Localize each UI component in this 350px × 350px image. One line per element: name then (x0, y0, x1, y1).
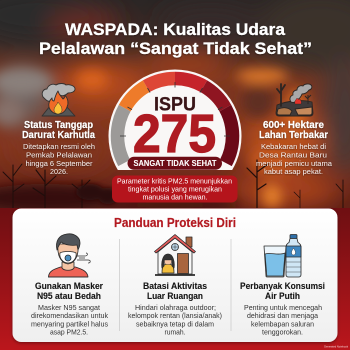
title: WASPADA: Kualitas Udara (65, 20, 286, 39)
panel: panduan proteksi diri (12, 208, 338, 342)
icon: glass and water bottle (264, 234, 301, 277)
gauge backing disc (108, 70, 242, 170)
text block: air putih description: dehidrasi dan menjaga (247, 312, 318, 320)
icon: person with N95 mask (48, 234, 90, 277)
bottom red band (0, 208, 350, 350)
callout: PM2.5 parameter: manusia dan hewan. (142, 194, 208, 202)
text block: 600+ hektare: kabut asap pekat. (264, 168, 323, 176)
text block: aktivitas description (128, 304, 222, 336)
text block: aktivitas heading (143, 281, 207, 301)
text block: masker heading: Gunakan Masker (35, 281, 103, 291)
text block: status tanggap darurat: hingga 6 September (26, 160, 93, 168)
text block: air putih heading: Perbanyak Konsumsi (240, 281, 325, 291)
text block: aktivitas heading: Batasi Aktivitas (143, 281, 207, 291)
value 275: 275 (133, 104, 216, 164)
text block: masker description (31, 304, 108, 336)
callout: PM2.5 parameter: Parameter kritis PM2.5 menunjukkan (117, 178, 232, 185)
ISPU label: ISPU (154, 94, 196, 116)
text block: status tanggap darurat: Ditetapkan resmi oleh (23, 143, 95, 151)
text block: air putih heading (240, 281, 325, 301)
gauge ticks (120, 82, 230, 136)
status pill: SANGAT TIDAK SEHAT (134, 159, 217, 168)
title: Pelalawan “Sangat Tidak Sehat” (39, 39, 312, 58)
text block: 600+ hektare: 600+ Hektare (263, 120, 325, 131)
text block: aktivitas description: rumah. (164, 328, 186, 336)
text block: 600+ hektare: Lahan Terbakar (259, 130, 328, 141)
callout: PM2.5 parameter: tingkat polusi yang merugikan (128, 186, 222, 194)
text block: air putih description (244, 304, 322, 336)
text block: aktivitas description: kelompok rentan (lansia/anak) (128, 312, 222, 320)
icon: person staying in house (154, 234, 196, 275)
gauge segments (117, 78, 233, 163)
icon: burning smoke and fire (42, 84, 75, 116)
credit line: Generated Notebook (324, 344, 349, 348)
text block: aktivitas description: sebaiknya tetap di dalam (136, 320, 214, 328)
text block: masker heading: N95 atau Bedah (37, 291, 101, 301)
text block: aktivitas heading: Luar Ruangan (147, 291, 203, 301)
text block: 600+ hektare (256, 120, 332, 176)
text block: air putih description: Penting untuk mencegah (244, 304, 322, 312)
text block: 600+ hektare: menjadi pemicu utama (256, 160, 332, 168)
text block: status tanggap darurat: 2026. (50, 168, 68, 176)
text block: status tanggap darurat (22, 120, 96, 176)
panel: ISPU gauge (108, 70, 242, 170)
text block: masker description: Masker N95 sangat (38, 304, 100, 312)
text block: status tanggap darurat: Status Tanggap (24, 120, 93, 131)
text block: status tanggap darurat: Pemkab Pelalawan (26, 152, 92, 160)
heading: Panduan Proteksi Diri (114, 215, 236, 230)
dead tree silhouettes (3, 160, 343, 208)
text block: status tanggap darurat: Darurat Karhutla (22, 130, 96, 141)
text block: 600+ hektare: Desa Rantau Baru (259, 152, 327, 160)
callout: PM2.5 parameter (112, 176, 238, 202)
title (39, 20, 312, 58)
text block: 600+ hektare: Kebakaran hebat di (261, 143, 326, 151)
text block: masker description: menyaring partikel halus (31, 320, 108, 328)
text block: air putih description: tenggorokan. (262, 328, 303, 336)
text block: air putih heading: Air Putih (265, 291, 300, 301)
text block: masker heading (35, 281, 103, 301)
text block: masker description: asap PM2.5. (50, 328, 88, 336)
icon: burned land with dead tree (276, 84, 313, 116)
text block: air putih description: kelembapan saluran (251, 320, 314, 328)
text block: masker description: direkomendasikan untuk (31, 312, 108, 320)
text block: aktivitas description: Hindari olahraga outdoor; (135, 304, 216, 312)
